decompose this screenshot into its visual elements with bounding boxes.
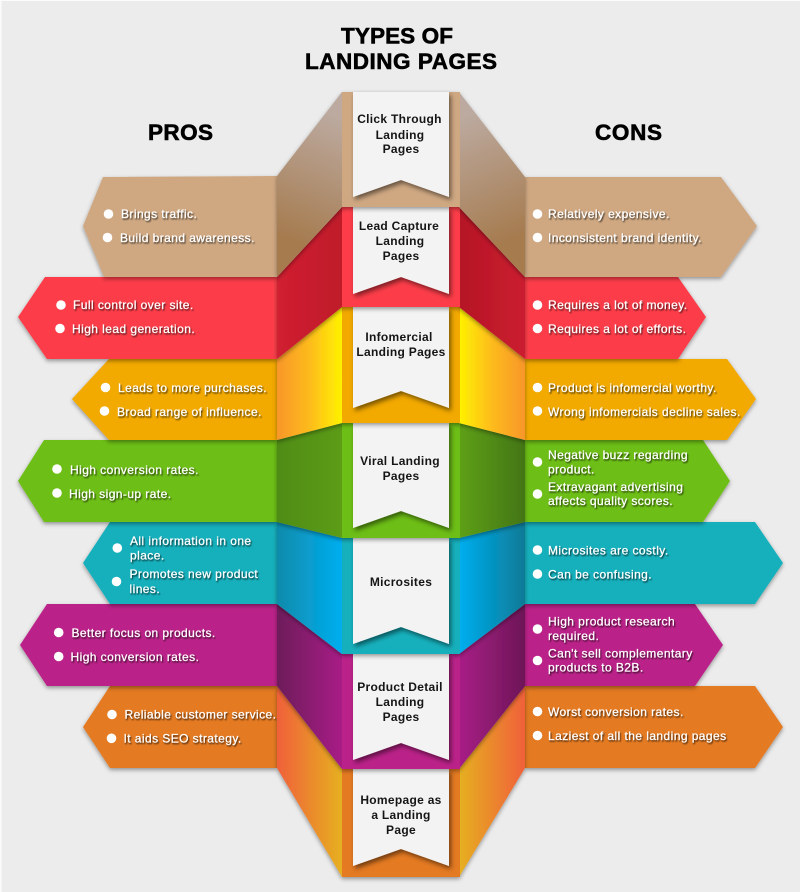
ribbon: viral [353,423,449,528]
ribbon: lead capture [353,207,449,294]
cons list: infomercial: Product is infomercial worthy. [548,381,717,395]
band: pros click through [83,176,277,277]
ribbon label: click through: Click Through [357,112,442,126]
ribbon label: product detail: Landing [376,695,424,709]
band: cons product detail [525,604,723,686]
ribbon label: homepage: a Landing [371,808,431,822]
cons list: infomercial [533,381,741,419]
row 7: homepage as a landing page [83,686,783,877]
cons list: viral: product. [548,462,595,476]
cons list: click through: Inconsistent brand identity. [548,231,702,245]
band: pros homepage [83,686,277,768]
ribbon label: lead capture: Landing [376,234,424,248]
pros list: microsites: All information in one [130,534,252,548]
cons list: infomercial: Wrong infomercials decline sales. [548,405,741,419]
cons list: click through [533,207,702,245]
cons list: microsites [533,544,669,582]
cons list: lead capture: Requires a lot of efforts. [548,322,686,336]
center block: click through [277,92,525,277]
pros list: viral: High conversion rates. [70,463,199,477]
cons list: viral [533,448,688,508]
ribbon label: product detail: Pages [383,710,419,724]
ribbon label: click through: Pages [383,142,419,156]
band: pros viral [18,440,277,522]
pros list: viral: High sign-up rate. [69,487,171,501]
pros list: lead capture [55,298,195,336]
pros list: product detail: High conversion rates. [70,650,199,664]
ribbon: homepage [353,769,449,866]
pros list: homepage: It aids SEO strategy. [124,731,242,745]
cons list: microsites: Microsites are costly. [548,544,669,558]
center block: microsites [277,522,525,654]
row 1: click through landing pages [83,92,757,277]
row 5: microsites [83,522,783,654]
ribbon label: lead capture: Pages [383,249,419,263]
band: cons viral [525,440,730,522]
pros list: viral [52,463,199,501]
center block: homepage [277,686,525,877]
ribbon label: viral: Viral Landing [360,454,440,468]
cons list: product detail: required. [548,629,599,643]
center block: infomercial [277,307,525,440]
pros list: click through [103,207,255,245]
ribbon label: product detail: Product Detail [357,680,443,694]
ribbon: infomercial [353,307,449,408]
pros list: microsites: place. [130,548,165,562]
band: cons homepage [525,686,783,768]
cons list: viral: Negative buzz regarding [548,448,688,462]
band: cons lead capture [525,277,706,359]
row 4: viral landing pages [18,423,730,538]
heading: cons: CONS [595,120,662,145]
row 2: lead capture landing pages [18,207,706,359]
pros list: product detail: Better focus on products. [72,626,216,640]
pros list: lead capture: Full control over site. [73,298,194,312]
ribbon: click through [353,92,449,197]
band: cons microsites [525,522,783,604]
cons list: click through: Relatively expensive. [548,207,670,221]
cons list: product detail: products to B2B. [548,661,644,675]
ribbon: product detail [353,654,449,760]
row 3: infomercial landing pages [72,307,756,440]
title: TYPES OF [341,24,453,48]
heading: pros: PROS [148,120,213,145]
band: pros microsites [83,522,277,604]
pros list: infomercial [100,381,267,419]
ribbon label: lead capture: Lead Capture [359,219,439,233]
cons list: product detail [533,615,693,675]
ribbon label: click through: Landing [376,128,424,142]
ribbon label: infomercial: Landing Pages [356,345,446,359]
row 6: product detail landing pages [20,604,723,769]
band: cons click through [525,177,757,277]
cons list: microsites: Can be confusing. [548,568,652,582]
cons list: homepage: Laziest of all the landing pages [548,729,727,743]
pros list: microsites: lines. [130,582,160,596]
ribbon label: infomercial: Infomercial [365,330,433,344]
cons list: viral: affects quality scores. [548,494,673,508]
band: pros product detail [20,604,277,686]
ribbon: microsites [353,538,449,644]
title [305,24,497,74]
cons list: lead capture: Requires a lot of money. [548,298,688,312]
ribbon label: viral: Pages [383,469,419,483]
pros list: microsites: Promotes new product [130,567,258,581]
pros list: infomercial: Leads to more purchases. [118,381,267,395]
cons list: product detail: High product research [548,615,675,629]
ribbon label: homepage: Homepage as [360,793,442,807]
cons list: lead capture [533,298,688,336]
center block: viral [277,423,525,538]
pros list: infomercial: Broad range of influence. [117,405,262,419]
cons list: homepage [533,705,727,743]
pros list: lead capture: High lead generation. [72,322,195,336]
cons list: product detail: Can't sell complementary [548,647,693,661]
band: pros lead capture [18,277,277,359]
cons list: viral: Extravagant advertising [548,480,683,494]
ribbon label: microsites: Microsites [370,575,432,589]
band: pros infomercial [72,359,277,440]
center block: lead capture [277,207,525,359]
band: cons infomercial [525,359,756,440]
cons list: homepage: Worst conversion rates. [548,705,684,719]
pros list: microsites [112,534,258,596]
pros list: click through: Build brand awareness. [120,231,255,245]
pros list: click through: Brings traffic. [121,207,197,221]
pros list: product detail [54,626,216,664]
pros list: homepage [107,708,276,745]
title: LANDING PAGES [305,49,497,74]
ribbon label: homepage: Page [386,823,416,837]
pros list: homepage: Reliable customer service. [124,708,276,722]
center block: product detail [277,604,525,769]
